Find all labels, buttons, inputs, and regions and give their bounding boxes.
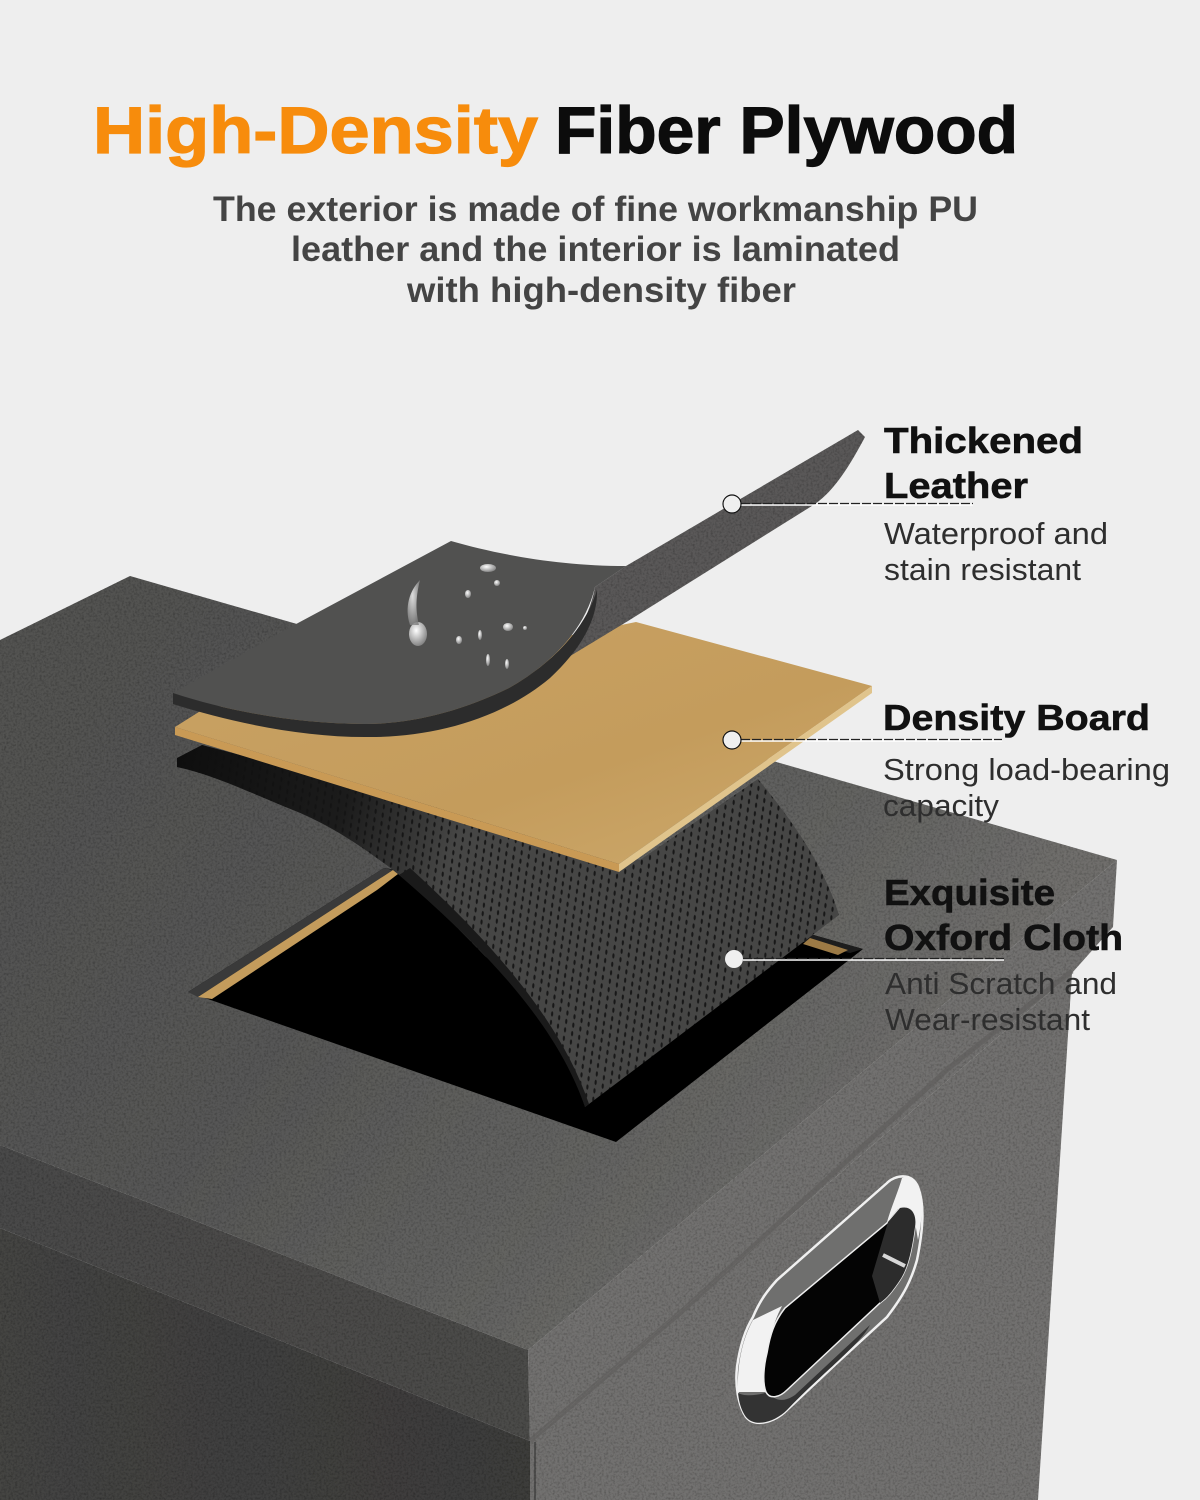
- label heading: Leather: [884, 465, 1028, 506]
- label heading: [884, 872, 1123, 958]
- box surfaces with leather grain: [0, 576, 1117, 1500]
- crease under lid: [530, 971, 1072, 1441]
- handle opening: [764, 1207, 915, 1397]
- layer: density board: [175, 622, 872, 872]
- water droplets: [408, 564, 527, 669]
- wood edge right of opening: [803, 934, 863, 953]
- title: Fiber Plywood: [555, 93, 1018, 167]
- subtitle: [213, 190, 978, 310]
- layer: oxford cloth: [177, 745, 839, 1107]
- subtitle: The exterior is made of fine workmanship PU: [213, 190, 978, 229]
- lid right side: [528, 860, 1117, 1441]
- callout: thickened leather: [723, 420, 1108, 587]
- callout: density board: [723, 697, 1170, 823]
- marker dot: [725, 950, 743, 968]
- title: [93, 93, 1018, 167]
- label text: [884, 516, 1108, 587]
- opening in lid: [188, 868, 863, 1142]
- label text: capacity: [883, 788, 999, 823]
- label heading: Thickened: [884, 420, 1083, 461]
- label text: stain resistant: [884, 552, 1081, 587]
- marker dot: [723, 495, 741, 513]
- leather top face: [173, 541, 626, 724]
- subtitle: leather and the interior is laminated: [291, 230, 900, 269]
- box right face: [530, 973, 1072, 1500]
- subtitle: with high-density fiber: [406, 271, 796, 310]
- handle inner wall: [872, 1207, 915, 1303]
- lid left side: [0, 1145, 530, 1441]
- leather underside: [557, 430, 865, 664]
- label text: Anti Scratch and: [885, 966, 1117, 1001]
- callout: oxford cloth: [725, 872, 1123, 1037]
- lid top surface: [0, 576, 1117, 1350]
- label heading: [884, 420, 1083, 506]
- upper right chrome highlight: [887, 1177, 922, 1240]
- label text: Wear-resistant: [885, 1002, 1090, 1037]
- wood edge of opening: [198, 870, 398, 999]
- marker dot: [723, 731, 741, 749]
- label text: Strong load-bearing: [883, 752, 1170, 787]
- label heading: Exquisite: [884, 872, 1055, 913]
- storage box: [0, 576, 1117, 1500]
- title: High-Density: [93, 93, 538, 167]
- lower lip: [738, 1325, 870, 1423]
- label text: Waterproof and: [884, 516, 1108, 551]
- handle highlight: [883, 1255, 905, 1266]
- dark rim of opening: [188, 868, 393, 997]
- leader line: [741, 740, 1002, 741]
- label heading: Density Board: [883, 697, 1150, 738]
- label heading: Oxford Cloth: [884, 917, 1123, 958]
- leather front edge: [173, 590, 597, 737]
- leader line: [741, 504, 973, 505]
- leader line: [743, 958, 1004, 960]
- box corner seam: [534, 1442, 536, 1500]
- box left face: [0, 1228, 530, 1500]
- handle: [736, 1176, 922, 1423]
- label text: [883, 752, 1170, 823]
- lower left chrome highlight: [738, 1306, 782, 1392]
- layer: thickened leather: [173, 430, 865, 737]
- chrome rim: [736, 1176, 922, 1423]
- label text: [885, 966, 1117, 1037]
